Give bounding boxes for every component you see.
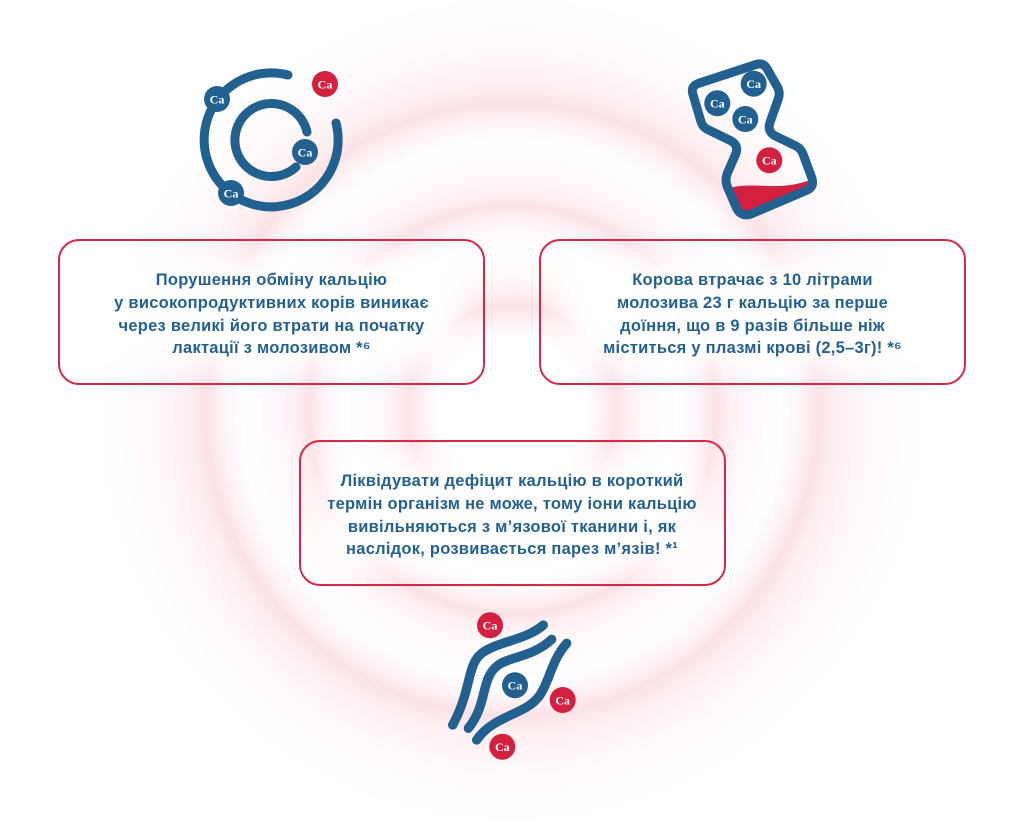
panel: calcium metabolism text — [58, 239, 485, 385]
icon: hourglass flask with calcium: Ca — [762, 154, 777, 168]
text: colostrum loss: доїння, що в 9 разів більше ніж — [620, 317, 885, 335]
text: colostrum loss — [603, 271, 902, 357]
text: colostrum loss: Корова втрачає з 10 літрами — [632, 271, 873, 289]
icon: calcium atom: Ca — [224, 186, 238, 200]
icon: hourglass flask with calcium — [692, 64, 813, 215]
text: calcium metabolism: через великі його втрати на початку — [119, 317, 424, 335]
text: muscle paresis: термін організм не може, тому іони кальцію — [327, 495, 697, 513]
text: muscle paresis: вивільняються з м’язової тканини і, як — [348, 518, 676, 536]
icon: hourglass flask with calcium: Ca — [746, 77, 761, 91]
text: colostrum loss: молозива 23 г кальцію за перше — [617, 294, 888, 312]
icon: hourglass flask with calcium: Ca — [710, 97, 725, 111]
icon: muscle fibres with calcium: Ca — [555, 693, 570, 707]
text: calcium metabolism — [114, 271, 429, 357]
text: colostrum loss: міститься у плазмі крові (2,5–3г)! *⁶ — [603, 339, 902, 357]
icon: calcium atom: Ca — [210, 92, 224, 106]
text: calcium metabolism: Порушення обміну кальцію — [156, 271, 387, 289]
icon: calcium atom: Ca — [298, 145, 312, 159]
text: calcium metabolism: лактації з молозивом *⁶ — [172, 339, 371, 357]
icon: muscle fibres with calcium: Ca — [483, 619, 497, 633]
panel: colostrum loss text — [539, 239, 966, 385]
panel: muscle paresis text — [298, 440, 726, 586]
icon: calcium atom: Ca — [318, 77, 332, 91]
icon: muscle fibres with calcium: Ca — [495, 740, 510, 754]
icon: hourglass flask with calcium: Ca — [738, 112, 753, 126]
text: calcium metabolism: у високопродуктивних корів виникає — [114, 294, 429, 312]
text: muscle paresis: Ліквідувати дефіцит кальцію в короткий — [341, 472, 683, 490]
icon: muscle fibres with calcium — [453, 612, 576, 760]
icon: muscle fibres with calcium: Ca — [508, 679, 522, 693]
text: muscle paresis — [327, 472, 697, 558]
icon: calcium atom — [204, 71, 338, 207]
text: muscle paresis: наслідок, розвивається парез м’язів! *¹ — [346, 540, 678, 558]
